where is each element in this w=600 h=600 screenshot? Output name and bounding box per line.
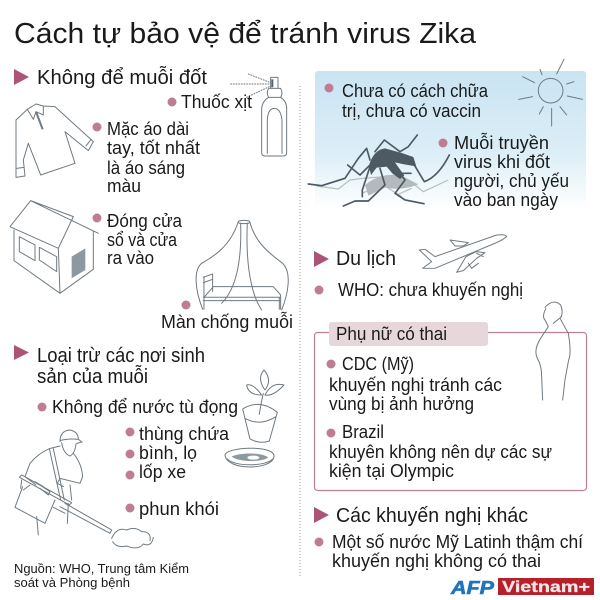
source note: soát và Phòng bệnh <box>14 575 130 590</box>
breeding site list: bình, lọ <box>139 443 197 463</box>
icon: sun <box>519 59 583 126</box>
icon: bed with mosquito net <box>196 220 288 310</box>
transmission text: Muỗi truyền <box>454 132 549 153</box>
clothing advice: là áo sáng <box>107 158 185 178</box>
CDC advice: khuyến nghị tránh các <box>329 375 502 395</box>
breeding site list: lốp xe <box>139 462 186 482</box>
logo: AFP Vietnam+: Vietnam+ <box>502 579 590 596</box>
clothing advice <box>92 119 200 196</box>
section: loại trừ nơi sinh sản <box>14 345 284 590</box>
no cure text: Chưa có cách chữa <box>342 81 489 101</box>
clothing advice: Mặc áo dài <box>107 119 189 139</box>
transmission text <box>438 132 569 210</box>
icon: house <box>10 201 98 293</box>
other advice text <box>314 532 583 571</box>
clothing advice: màu <box>107 176 141 196</box>
icon: airplane <box>419 235 507 272</box>
breeding site list: phun khói <box>139 499 219 519</box>
panel: pregnant women <box>314 302 586 490</box>
door and window advice <box>92 211 183 268</box>
icon: pregnant woman <box>536 302 570 400</box>
other advice text: Một số nước Mỹ Latinh thậm chí <box>332 532 583 552</box>
CDC advice <box>326 354 502 414</box>
tag: heading <box>329 322 488 346</box>
no cure text: trị, chưa có vaccin <box>342 101 481 121</box>
panel: mosquito facts <box>308 59 586 210</box>
source note: Nguồn: WHO, Trung tâm Kiểm <box>14 561 189 576</box>
tag: heading: Phụ nữ có thai <box>336 324 447 344</box>
section: không để muỗi đốt <box>10 66 293 332</box>
transmission text: virus khi đốt <box>454 152 550 172</box>
Brazil advice <box>326 422 552 481</box>
icon: mosquito <box>308 135 449 206</box>
standing water advice: Không để nước tù đọng <box>52 397 238 417</box>
CDC advice: CDC (Mỹ) <box>342 354 414 374</box>
breeding site list: thùng chứa <box>139 424 230 444</box>
icon: plant pot and saucer <box>225 370 284 467</box>
section heading: sản của muỗi <box>37 365 148 388</box>
door and window advice: ra vào <box>107 248 154 268</box>
clothing advice: tay, tốt nhất <box>107 138 200 158</box>
section heading: Loại trừ các nơi sinh <box>37 345 205 367</box>
spray label: Thuốc xịt <box>181 92 252 112</box>
icon: fumigation worker <box>15 430 153 548</box>
section heading <box>14 345 205 388</box>
breeding site list <box>126 424 230 519</box>
logo: AFP Vietnam+: AFP <box>450 578 495 598</box>
door and window advice: sổ và cửa <box>107 230 178 250</box>
section heading: Du lịch <box>336 248 396 270</box>
section heading: Các khuyến nghị khác <box>336 505 528 527</box>
icon: long sleeve shirt <box>16 104 93 177</box>
section: other recommendations <box>314 505 583 571</box>
icon: spray bottle <box>231 74 287 156</box>
WHO advice: WHO: chưa khuyến nghị <box>338 280 523 300</box>
mosquito net label <box>161 300 293 332</box>
door and window advice: Đóng cửa <box>107 211 183 231</box>
Brazil advice: Brazil <box>342 422 384 442</box>
title: Cách tự bảo vệ để tránh virus Zika <box>14 18 477 50</box>
section: du lịch <box>314 235 523 300</box>
other advice text: khuyến nghị không có thai <box>332 551 541 571</box>
source note <box>14 561 189 590</box>
section heading: Không để muỗi đốt <box>37 66 207 89</box>
Brazil advice: kiện tại Olympic <box>329 461 454 481</box>
logo: AFP Vietnam+ <box>450 578 594 598</box>
mosquito net label: Màn chống muỗi <box>161 311 293 332</box>
Brazil advice: khuyên không nên dự các sự <box>329 442 552 462</box>
transmission text: vào ban ngày <box>454 190 558 210</box>
transmission text: người, chủ yếu <box>454 171 569 191</box>
no cure text <box>324 81 489 121</box>
CDC advice: vùng bị ảnh hưởng <box>329 394 474 414</box>
